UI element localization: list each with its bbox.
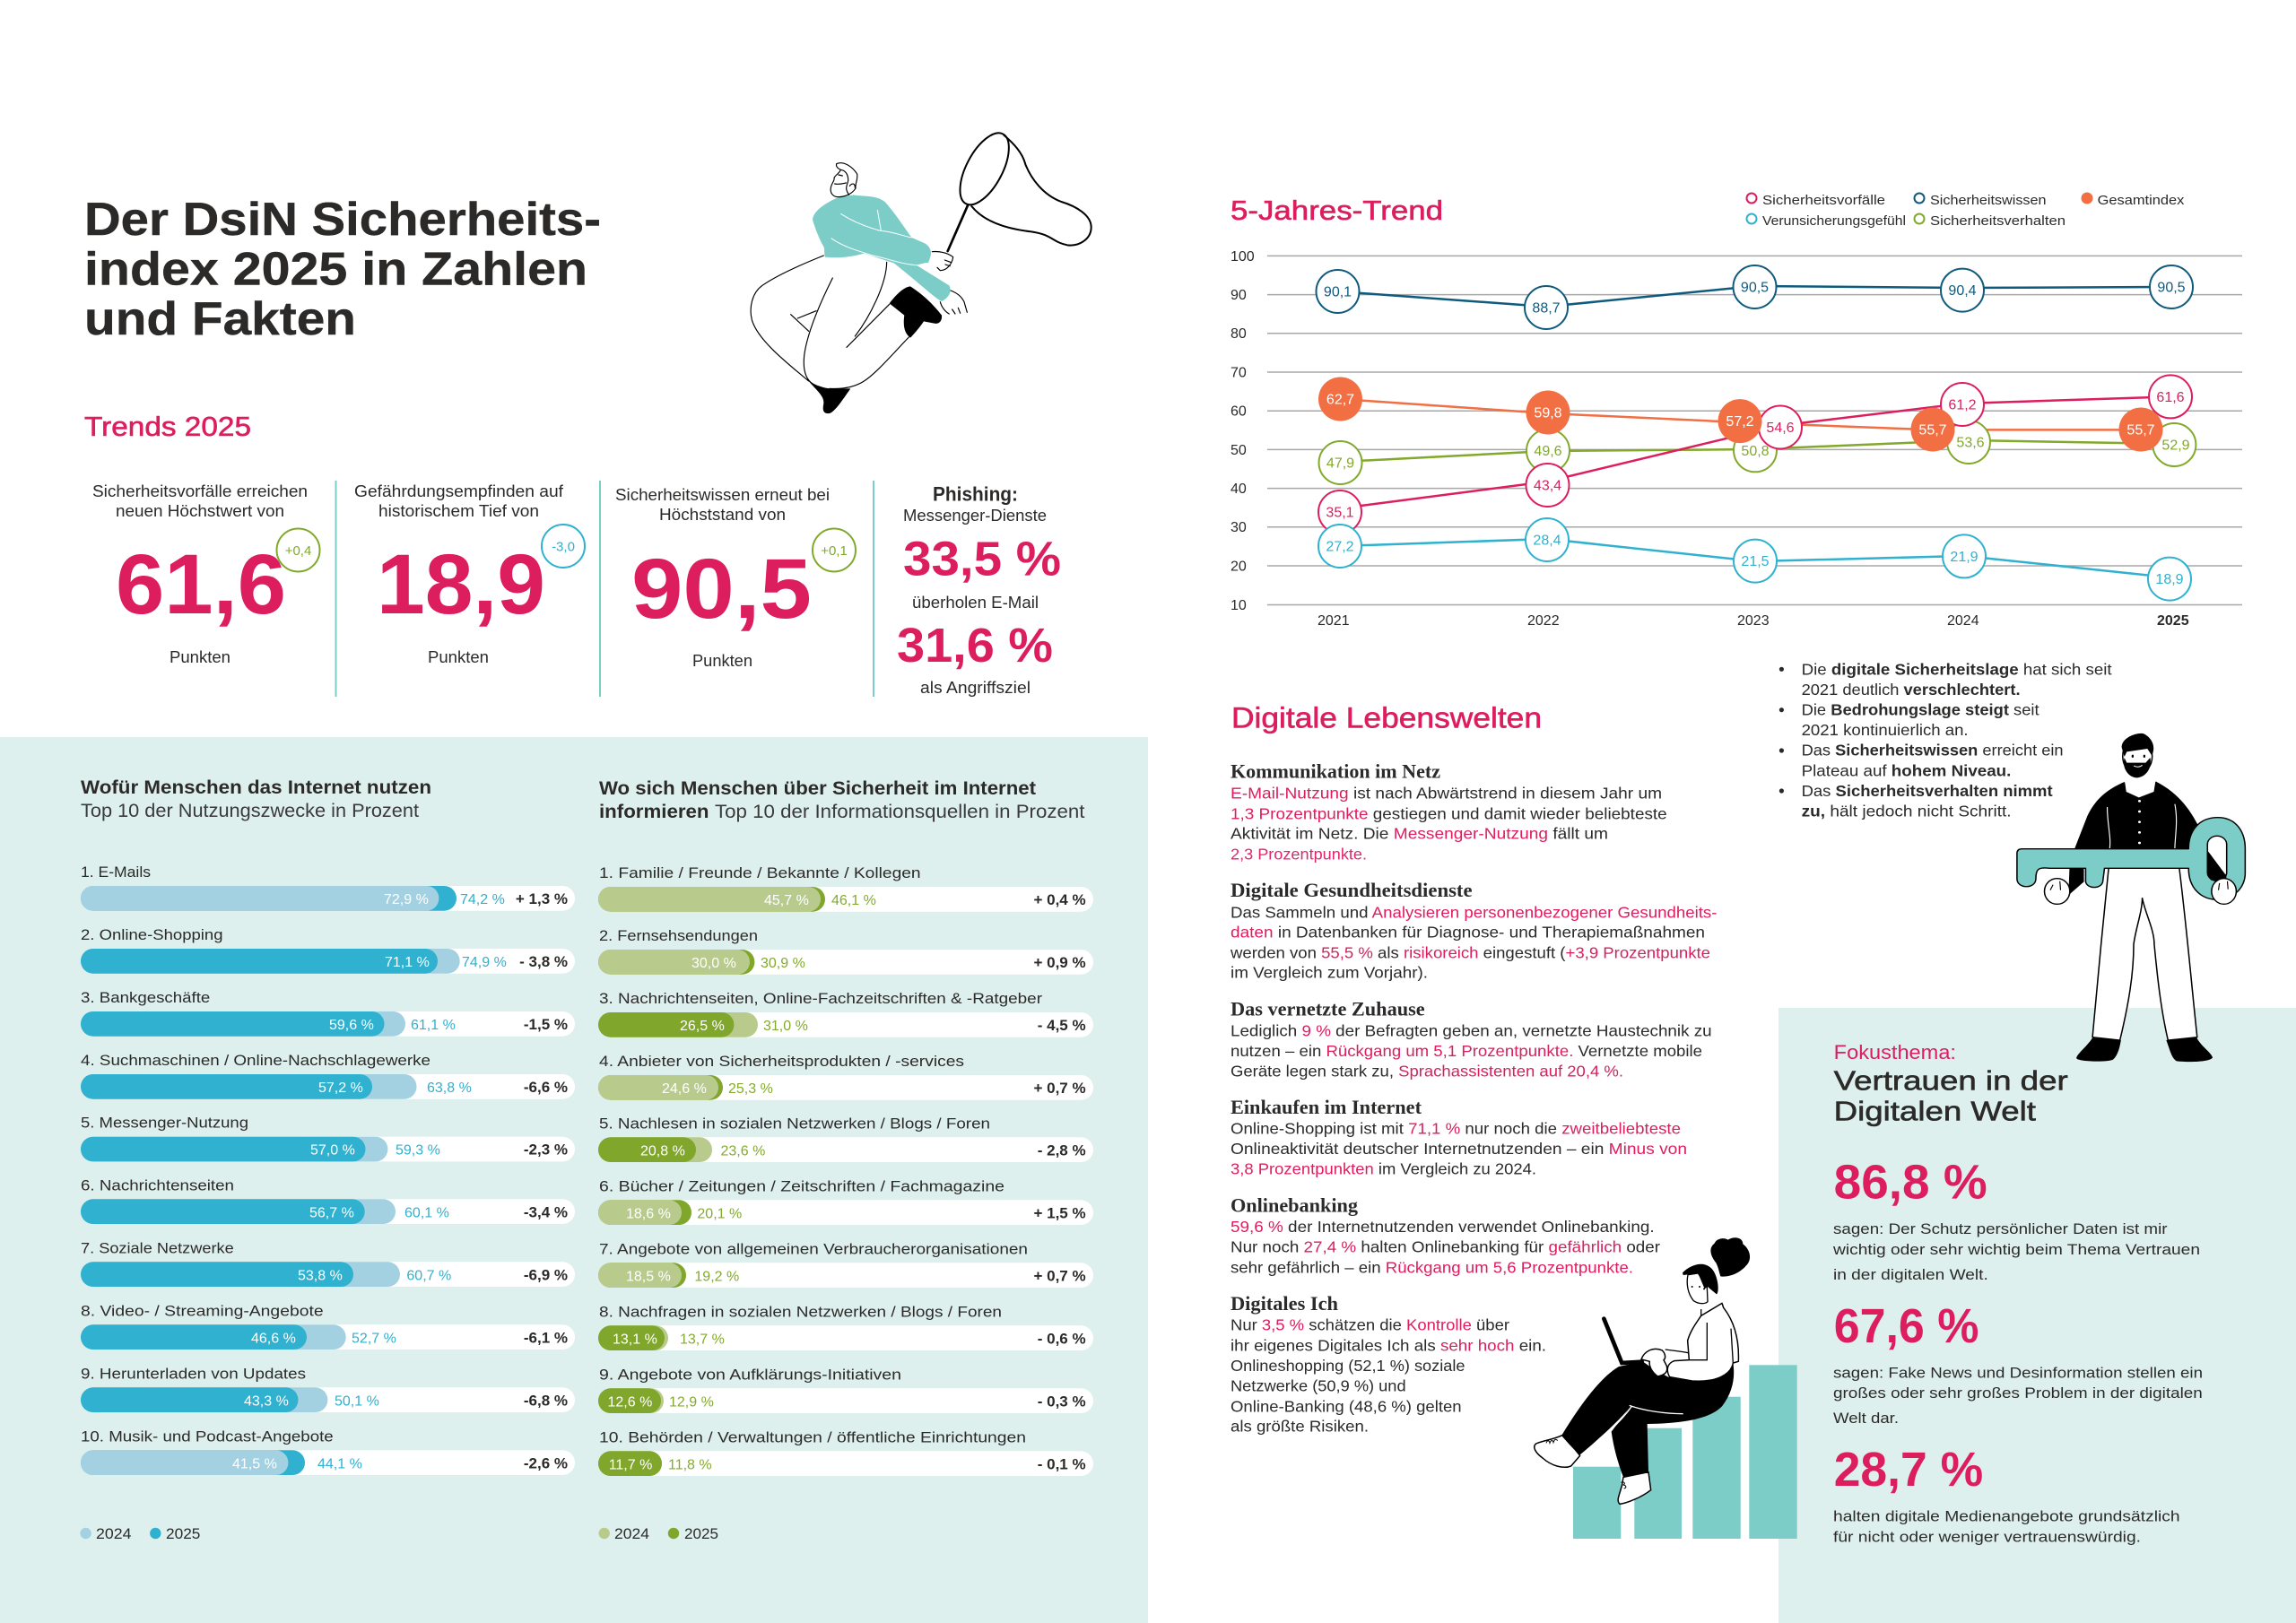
- legend: trend chart: Sicherheitswissen: [1930, 193, 2047, 208]
- x axis labels: 2023: [1737, 613, 1770, 629]
- bar chart: information sources: 19,2 %: [694, 1269, 739, 1284]
- bar chart: usage purposes: 8. Video- / Streaming-Angebote: [81, 1302, 324, 1319]
- series: Sicherheitsvorfälle: 61,2: [1948, 398, 1977, 412]
- stat: Sicherheitsvorfälle: Sicherheitsvorfälle erreichen: [92, 482, 308, 500]
- bar chart: information sources: - 0,3 %: [1038, 1393, 1086, 1410]
- series: Verunsicherungsgefühl: [1318, 518, 2191, 601]
- bar chart: information sources: - 2,8 %: [1038, 1141, 1086, 1159]
- bar chart: usage purposes: 41,5 %: [232, 1456, 277, 1471]
- stat: Sicherheitsvorfälle: neuen Höchstwert von: [116, 502, 284, 520]
- stat: Gefährdungsempfinden: -3,0: [552, 540, 575, 554]
- text block: Digitales Ich: [1231, 1292, 1546, 1436]
- bar chart: usage purposes: 60,1 %: [404, 1205, 449, 1220]
- heading: Trends 2025: Trends 2025: [84, 411, 251, 442]
- bar chart: information sources: 10. Behörden / Verwaltungen / öffentliche Einrichtungen: [599, 1428, 1026, 1445]
- series: Sicherheitswissen: 88,7: [1532, 301, 1561, 316]
- bar chart: information sources: + 0,4 %: [1033, 891, 1086, 908]
- stat: Gefährdungsempfinden: [354, 482, 585, 666]
- series: Sicherheitswissen: 90,5: [2157, 280, 2186, 296]
- text block: Onlinebanking: 59,6 % der Internetnutzenden verwendet Onlinebanking.: [1231, 1218, 1655, 1236]
- y axis labels: 90: [1231, 288, 1247, 303]
- text block: Digitale Gesundheitsdienste: werden von 55,5 % als risikoreich eingestuft ( +3,9 Prozentpunkte: [1230, 943, 1710, 961]
- bar chart: usage purposes: 61,1 %: [411, 1018, 456, 1033]
- stat: Phishing: als Angriffsziel: [920, 679, 1031, 697]
- heading: information chart: informieren: [599, 802, 709, 822]
- series: Sicherheitsvorfälle: 43,4: [1534, 479, 1561, 493]
- series: Verunsicherungsgefühl: 27,2: [1326, 540, 1354, 554]
- stat: 86,8 %: 86,8 %: [1834, 1156, 1987, 1210]
- y axis labels: 40: [1231, 482, 1247, 497]
- series: Sicherheitsvorfälle: [1318, 375, 2192, 534]
- bar chart: information sources: 12,6 %: [608, 1394, 652, 1410]
- bar chart: usage purposes: -6,6 %: [524, 1079, 568, 1096]
- bar chart: usage purposes: 50,1 %: [335, 1393, 379, 1409]
- bullet list: [1779, 660, 2112, 820]
- stat: 28,7 %: [1833, 1443, 2180, 1545]
- bar chart: information sources: 18,6 %: [626, 1206, 671, 1221]
- bullet list: Plateau auf hohem Niveau.: [1802, 761, 2011, 779]
- bar chart: information sources: 31,0 %: [763, 1019, 808, 1034]
- y axis labels: 30: [1231, 520, 1247, 535]
- bar chart: usage purposes: 71,1 %: [385, 955, 430, 970]
- series: Gesamtindex: 59,8: [1534, 405, 1562, 421]
- bar chart: usage purposes: 56,7 %: [309, 1205, 354, 1220]
- title: und Fakten: [84, 293, 356, 345]
- text block: Das vernetzte Zuhause: Lediglich 9 % der Befragten geben an, vernetzte Haustechnik zu: [1231, 1021, 1712, 1039]
- heading: Fokusthema: Digitalen Welt: [1834, 1096, 2036, 1127]
- text block: Einkaufen im Internet: Einkaufen im Internet: [1231, 1096, 1422, 1118]
- series: Gesamtindex: 62,7: [1326, 393, 1354, 407]
- bar chart: information sources: [598, 864, 1093, 1476]
- stat: Sicherheitsvorfälle: Punkten: [170, 648, 230, 666]
- y axis labels: 50: [1231, 443, 1247, 458]
- bar chart: information sources: - 0,1 %: [1038, 1455, 1086, 1472]
- bar chart: usage purposes: 1. E-Mails: [81, 864, 151, 881]
- bar chart: information sources: 30,0 %: [691, 956, 736, 971]
- title: Der DsiN Sicherheits-: [84, 194, 601, 246]
- bar chart: usage purposes: 60,7 %: [406, 1268, 451, 1283]
- y axis labels: 10: [1231, 598, 1247, 613]
- bar chart: usage purposes: 10. Musik- und Podcast-Angebote: [81, 1428, 334, 1445]
- stat: 67,6 %: großes oder sehr großes Problem in der digitalen: [1833, 1384, 2203, 1402]
- y axis labels: 100: [1231, 249, 1255, 265]
- bar chart: usage purposes: -6,1 %: [524, 1329, 568, 1346]
- series: Sicherheitswissen: 90,4: [1948, 283, 1977, 299]
- series: Sicherheitsvorfälle: 35,1: [1326, 506, 1354, 520]
- bar chart: usage purposes: 63,8 %: [427, 1081, 472, 1096]
- legend: usage chart: 2024: [96, 1525, 131, 1542]
- illustration: man holding key: [2017, 733, 2245, 1062]
- stat: 67,6 %: Welt dar.: [1833, 1410, 1899, 1427]
- bullet list: Das Sicherheitsverhalten nimmt: [1802, 782, 2053, 800]
- stat: Phishing: 31,6 %: [897, 619, 1053, 673]
- text block: Einkaufen im Internet: Onlineaktivität deutscher Internetnutzenden – ein Minus von: [1231, 1140, 1687, 1158]
- series lines: [1338, 286, 2174, 577]
- series: Verunsicherungsgefühl: 28,4: [1533, 533, 1561, 549]
- text block: Digitales Ich: Onlineshopping (52,1 %) soziale: [1231, 1357, 1465, 1375]
- bar chart: information sources: 12,9 %: [669, 1394, 714, 1410]
- stat: 67,6 %: [1833, 1299, 2203, 1427]
- bar chart: information sources: 24,6 %: [662, 1081, 707, 1097]
- series: Sicherheitswissen: [1317, 265, 2193, 329]
- x axis labels: 2024: [1947, 613, 1979, 629]
- legend: trend chart: Verunsicherungsgefühl: [1762, 213, 1906, 229]
- series: Sicherheitsverhalten: [1318, 421, 2196, 484]
- bar chart: usage purposes: 52,7 %: [352, 1331, 396, 1346]
- stat: Phishing: überholen E-Mail: [912, 594, 1039, 612]
- illustration: bars with woman on laptop: [1535, 1237, 1797, 1539]
- bar chart: usage purposes: - 3,8 %: [519, 953, 568, 970]
- bar chart: usage purposes: -2,3 %: [524, 1141, 568, 1159]
- series: Sicherheitsverhalten: 52,9: [2161, 438, 2190, 454]
- heading: usage chart: [81, 777, 431, 821]
- bar chart: information sources: 9. Angebote von Aufklärungs-Initiativen: [599, 1366, 901, 1383]
- stat: Gefährdungsempfinden: Punkten: [428, 648, 489, 666]
- stat: Sicherheitswissen: [615, 486, 856, 670]
- text block: Das vernetzte Zuhause: nutzen – ein Rückgang um 5,1 Prozentpunkte. Vernetzte mobile: [1231, 1042, 1702, 1060]
- bar chart: usage purposes: 74,2 %: [460, 892, 505, 907]
- bar chart: usage purposes: -6,9 %: [524, 1266, 568, 1283]
- bar chart: usage purposes: 4. Suchmaschinen / Online-Nachschlagewerke: [81, 1052, 430, 1069]
- bar chart: information sources: + 0,7 %: [1033, 1267, 1086, 1284]
- bar chart: information sources: 4. Anbieter von Sicherheitsprodukten / -services: [599, 1053, 964, 1070]
- series: Gesamtindex: 57,2: [1726, 414, 1754, 430]
- series: Sicherheitsverhalten: 53,6: [1956, 436, 1985, 450]
- stat: Phishing: Messenger-Dienste: [903, 507, 1047, 525]
- x axis labels: [1318, 613, 2189, 629]
- bar chart: usage purposes: 2. Online-Shopping: [81, 926, 222, 943]
- y axis labels: 80: [1231, 326, 1247, 342]
- heading: usage chart: Top 10 der Nutzungszwecke in Prozent: [81, 801, 419, 821]
- stat: 67,6 %: sagen: Fake News und Desinformation stellen ein: [1833, 1364, 2203, 1381]
- bar chart: usage purposes: -1,5 %: [524, 1016, 568, 1033]
- illustration: man with butterfly net: [751, 126, 1091, 413]
- line chart: 5-year trend: [1231, 249, 2242, 629]
- text block: Digitales Ich: ihr eigenes Digitales Ich als sehr hoch ein.: [1231, 1336, 1546, 1354]
- bar chart: usage purposes: 59,6 %: [329, 1018, 374, 1033]
- x axis labels: 2025: [2157, 613, 2189, 629]
- bar chart: information sources: 20,1 %: [697, 1206, 742, 1221]
- legend: information chart: [599, 1525, 718, 1542]
- bar chart: information sources: 26,5 %: [680, 1019, 725, 1034]
- bar chart: information sources: 13,7 %: [680, 1332, 725, 1347]
- bar chart: usage purposes: -3,4 %: [524, 1203, 568, 1220]
- x axis labels: 2021: [1318, 613, 1350, 629]
- text block: Onlinebanking: Nur noch 27,4 % halten Onlinebanking für gefährlich oder: [1231, 1238, 1660, 1256]
- stat: Phishing: 33,5 %: [903, 533, 1061, 586]
- text block: Digitales Ich: Netzwerke (50,9 %) und: [1231, 1377, 1406, 1395]
- stat: 86,8 %: wichtig oder sehr wichtig beim Thema Vertrauen: [1832, 1241, 2200, 1258]
- stat: Sicherheitsvorfälle: 61,6: [116, 537, 286, 632]
- panel: Fokusthema background: [1779, 1008, 2296, 1623]
- text block: Kommunikation im Netz: 2,3 Prozentpunkte.: [1231, 845, 1367, 863]
- series: Verunsicherungsgefühl: 18,9: [2155, 572, 2184, 587]
- bullet list: Das Sicherheitswissen erreicht ein: [1802, 742, 2064, 759]
- series: Sicherheitsverhalten: 47,9: [1326, 456, 1354, 472]
- text block: Kommunikation im Netz: [1231, 760, 1667, 863]
- stat: 86,8 %: sagen: Der Schutz persönlicher Daten ist mir: [1833, 1220, 2168, 1237]
- bar chart: information sources: 8. Nachfragen in sozialen Netzwerken / Blogs / Foren: [599, 1303, 1002, 1320]
- text block: Onlinebanking: Onlinebanking: [1231, 1194, 1358, 1216]
- bar chart: usage purposes: 3. Bankgeschäfte: [81, 989, 210, 1006]
- legend: trend chart: Sicherheitsvorfälle: [1762, 193, 1885, 208]
- bar chart: information sources: 2. Fernsehsendungen: [599, 927, 758, 944]
- bar chart: usage purposes: 46,6 %: [251, 1331, 296, 1346]
- bar chart: information sources: + 0,9 %: [1033, 954, 1086, 971]
- bar chart: information sources: 3. Nachrichtenseiten, Online-Fachzeitschriften & -Ratgeber: [599, 990, 1042, 1007]
- heading: information chart: Top 10 der Informationsquellen in Prozent: [715, 802, 1085, 822]
- title: index 2025 in Zahlen: [84, 244, 587, 296]
- bar chart: usage purposes: -2,6 %: [524, 1454, 568, 1471]
- stat: Sicherheitswissen: Höchststand von: [659, 506, 786, 524]
- stat: Gefährdungsempfinden: 18,9: [377, 537, 545, 632]
- heading: 5-Jahres-Trend: 5-Jahres-Trend: [1231, 195, 1443, 226]
- heading: information chart: Wo sich Menschen über Sicherheit im Internet: [599, 778, 1036, 799]
- bullet list: Die digitale Sicherheitslage hat sich seit: [1802, 660, 2112, 678]
- bullet list: 2021 deutlich verschlechtert.: [1802, 681, 2021, 699]
- title: [84, 194, 601, 345]
- text block: Digitale Gesundheitsdienste: Das Sammeln und Analysieren personenbezogener Gesundheits-: [1231, 903, 1718, 921]
- bar chart: usage purposes: 43,3 %: [244, 1393, 289, 1409]
- legend: trend chart: [1747, 192, 2185, 229]
- text block: Das vernetzte Zuhause: [1231, 997, 1712, 1081]
- y axis labels: 20: [1231, 560, 1247, 574]
- text block: Digitale Gesundheitsdienste: daten in Datenbanken für Diagnose- und Therapiemaßnahmen: [1231, 924, 1705, 942]
- text block: Digitales Ich: als größte Risiken.: [1231, 1418, 1369, 1436]
- bar chart: information sources: 46,1 %: [831, 893, 876, 908]
- text block: Onlinebanking: [1231, 1194, 1660, 1276]
- heading: Fokusthema: Vertrauen in der: [1834, 1065, 2068, 1097]
- stat: Sicherheitswissen: Sicherheitswissen erneut bei: [615, 486, 830, 504]
- stat: Gefährdungsempfinden: Gefährdungsempfinden auf: [354, 482, 564, 500]
- bar chart: usage purposes: 6. Nachrichtenseiten: [81, 1176, 234, 1193]
- bar chart: information sources: 45,7 %: [764, 893, 809, 908]
- stat: Phishing: Phishing:: [933, 482, 1018, 506]
- bullet list: zu, hält jedoch nicht Schritt.: [1802, 802, 2012, 820]
- stat: Sicherheitswissen: Punkten: [692, 652, 752, 670]
- y axis labels: [1231, 249, 1255, 613]
- bar chart: usage purposes: 44,1 %: [317, 1456, 362, 1471]
- text block: Kommunikation im Netz: E-Mail-Nutzung ist nach Abwärtstrend in diesem Jahr um: [1231, 785, 1662, 803]
- legend: trend chart: Gesamtindex: [2098, 193, 2185, 208]
- bar chart: information sources: 13,1 %: [613, 1332, 657, 1347]
- bar chart: usage purposes: 5. Messenger-Nutzung: [81, 1115, 248, 1132]
- bar chart: usage purposes: [81, 864, 575, 1475]
- stat: Sicherheitswissen: +0,1: [821, 543, 848, 559]
- text block: Kommunikation im Netz: 1,3 Prozentpunkte gestiegen und damit wieder beliebteste: [1231, 804, 1667, 822]
- bar chart: usage purposes: 59,3 %: [396, 1143, 440, 1159]
- text block: Onlinebanking: sehr gefährlich – ein Rückgang um 5,6 Prozentpunkte.: [1231, 1258, 1633, 1276]
- bar chart: usage purposes: 9. Herunterladen von Updates: [81, 1365, 306, 1382]
- text block: Digitale Gesundheitsdienste: [1230, 879, 1718, 982]
- legend: information chart: 2024: [614, 1525, 649, 1542]
- bar chart: usage purposes: 57,2 %: [318, 1081, 363, 1096]
- heading: usage chart: Wofür Menschen das Internet nutzen: [81, 777, 431, 798]
- legend: usage chart: 2025: [166, 1525, 200, 1542]
- y axis labels: 60: [1231, 404, 1247, 420]
- panel: usage and information bars: [0, 737, 1148, 1623]
- heading: Fokusthema: [1834, 1041, 2068, 1127]
- bullet list: 2021 kontinuierlich an.: [1802, 721, 1969, 739]
- series: Verunsicherungsgefühl: 21,5: [1741, 554, 1770, 569]
- stat: Phishing: [897, 482, 1061, 697]
- text block: Einkaufen im Internet: [1231, 1096, 1687, 1178]
- bar chart: information sources: 6. Bücher / Zeitungen / Zeitschriften / Fachmagazine: [599, 1177, 1004, 1194]
- text block: Digitales Ich: Nur 3,5 % schätzen die Kontrolle über: [1231, 1316, 1509, 1334]
- text block: Digitales Ich: Online-Banking (48,6 %) gelten: [1231, 1397, 1462, 1415]
- bar chart: usage purposes: 72,9 %: [384, 892, 429, 907]
- text block: Kommunikation im Netz: Kommunikation im Netz: [1231, 760, 1440, 783]
- bar chart: information sources: 23,6 %: [721, 1143, 765, 1159]
- stat: 86,8 %: [1832, 1156, 2200, 1283]
- heading: Digitale Lebenswelten: Digitale Lebenswelten: [1231, 702, 1542, 734]
- text block: Digitale Gesundheitsdienste: Digitale Gesundheitsdienste: [1231, 879, 1473, 901]
- stat: 28,7 %: für nicht oder weniger vertrauenswürdig.: [1833, 1528, 2141, 1545]
- series: Gesamtindex: [1318, 377, 2163, 452]
- stat: Sicherheitsvorfälle: [92, 482, 319, 666]
- stat: 28,7 %: halten digitale Medienangebote grundsätzlich: [1833, 1508, 2180, 1524]
- stat: 86,8 %: in der digitalen Welt.: [1833, 1266, 1988, 1283]
- bar chart: usage purposes: 57,0 %: [310, 1143, 355, 1159]
- text block: Das vernetzte Zuhause: Geräte legen stark zu, Sprachassistenten auf 20,4 %.: [1231, 1063, 1623, 1081]
- bar chart: usage purposes: 7. Soziale Netzwerke: [81, 1239, 234, 1256]
- bar chart: usage purposes: + 1,3 %: [516, 890, 568, 907]
- text block: Digitales Ich: Digitales Ich: [1231, 1292, 1338, 1315]
- bar chart: information sources: + 1,5 %: [1033, 1204, 1086, 1221]
- legend: information chart: 2025: [684, 1525, 718, 1542]
- text block: Einkaufen im Internet: Online-Shopping ist mit 71,1 % nur noch die zweitbeliebteste: [1231, 1120, 1681, 1138]
- legend: usage chart: [80, 1525, 200, 1542]
- panel: Fokusthema text: [1832, 1041, 2203, 1545]
- bar chart: information sources: - 4,5 %: [1038, 1017, 1086, 1034]
- stat: Sicherheitsvorfälle: +0,4: [285, 543, 311, 559]
- bar chart: usage purposes: 74,9 %: [462, 955, 507, 970]
- bar chart: information sources: 5. Nachlesen in sozialen Netzwerken / Blogs / Foren: [599, 1115, 990, 1132]
- bullet list: Die Bedrohungslage steigt seit: [1802, 701, 2039, 719]
- bar chart: information sources: + 0,7 %: [1033, 1080, 1086, 1097]
- stat: 28,7 %: 28,7 %: [1834, 1443, 1983, 1497]
- bar chart: information sources: - 0,6 %: [1038, 1330, 1086, 1347]
- bar chart: information sources: 7. Angebote von allgemeinen Verbraucherorganisationen: [599, 1240, 1028, 1257]
- series: Sicherheitswissen: 90,1: [1324, 285, 1352, 299]
- series: Sicherheitsverhalten: 49,6: [1534, 444, 1562, 459]
- series: Gesamtindex: 55,7: [2126, 423, 2155, 438]
- stat: 67,6 %: 67,6 %: [1834, 1299, 1979, 1353]
- bar chart: usage purposes: 53,8 %: [298, 1268, 343, 1283]
- text block: Das vernetzte Zuhause: Das vernetzte Zuhause: [1231, 997, 1425, 1020]
- bar chart: information sources: 30,9 %: [761, 956, 805, 971]
- series: Verunsicherungsgefühl: 21,9: [1950, 550, 1979, 565]
- stat: Gefährdungsempfinden: historischem Tief von: [378, 502, 539, 520]
- bar chart: information sources: 18,5 %: [626, 1269, 671, 1284]
- text block: Einkaufen im Internet: 3,8 Prozentpunkten im Vergleich zu 2024.: [1231, 1160, 1536, 1178]
- series: Sicherheitsvorfälle: 54,6: [1766, 421, 1795, 436]
- series: Sicherheitsvorfälle: 61,6: [2156, 390, 2185, 405]
- y axis labels: 70: [1231, 366, 1247, 380]
- series: Gesamtindex: 55,7: [1918, 423, 1947, 438]
- text block: Digitale Gesundheitsdienste: im Vergleich zum Vorjahr).: [1231, 964, 1428, 982]
- bar chart: information sources: 1. Familie / Freunde / Bekannte / Kollegen: [599, 864, 921, 881]
- bar chart: information sources: 25,3 %: [728, 1081, 773, 1097]
- bar chart: usage purposes: -6,8 %: [524, 1392, 568, 1409]
- legend: trend chart: Sicherheitsverhalten: [1930, 213, 2066, 229]
- bar chart: information sources: 11,7 %: [609, 1457, 652, 1472]
- bar chart: information sources: 11,8 %: [668, 1457, 712, 1472]
- stat: Sicherheitswissen: 90,5: [631, 542, 812, 637]
- series: Sicherheitswissen: 90,5: [1741, 280, 1769, 296]
- series: Sicherheitsverhalten: 50,8: [1741, 444, 1770, 459]
- bar chart: information sources: 20,8 %: [640, 1143, 685, 1159]
- x axis labels: 2022: [1527, 613, 1560, 629]
- heading: information chart: [599, 778, 1085, 822]
- text block: Kommunikation im Netz: Aktivität im Netz. Die Messenger-Nutzung fällt um: [1231, 825, 1608, 843]
- heading: Fokusthema: Fokusthema:: [1834, 1041, 1956, 1063]
